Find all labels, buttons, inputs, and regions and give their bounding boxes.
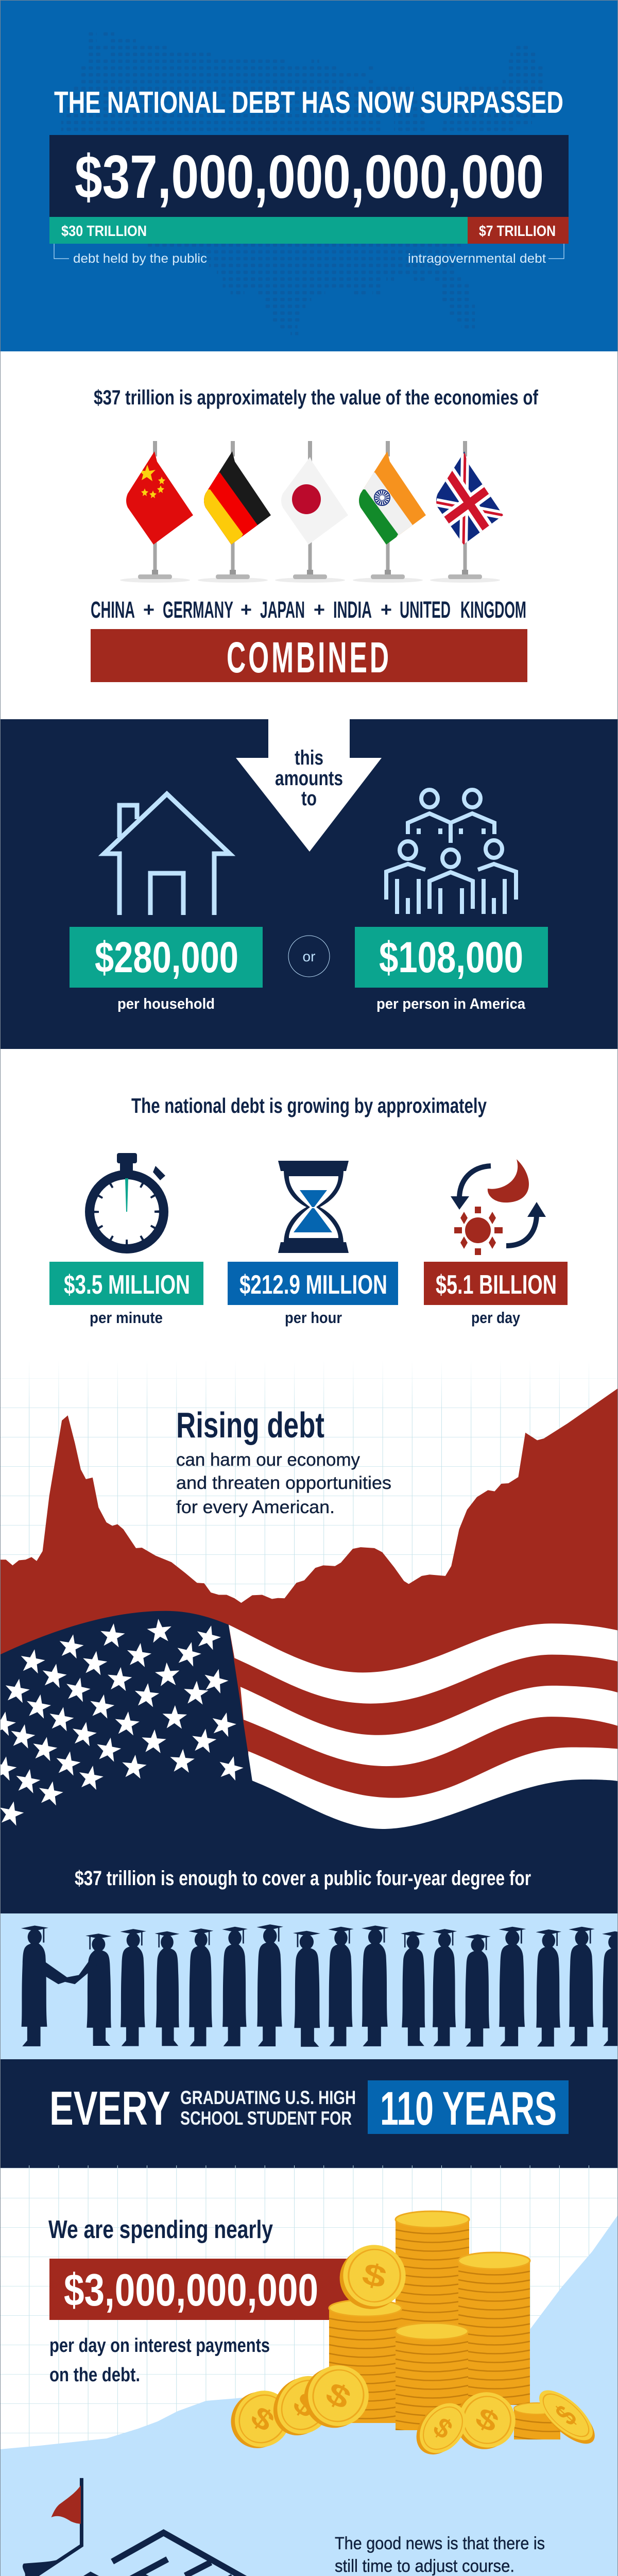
icon: group of people	[386, 790, 516, 914]
stat: per person	[355, 927, 548, 1012]
stat: per minute	[49, 1262, 203, 1327]
country list: GERMANY	[163, 597, 233, 623]
country list: JAPAN	[260, 597, 305, 623]
intragovernmental debt bar	[468, 217, 569, 244]
country list: KINGDOM	[460, 597, 526, 623]
icon: stopwatch	[90, 1153, 165, 1249]
flag: Germany	[198, 441, 271, 583]
stat: per day: per day	[471, 1309, 521, 1327]
chart: debt area	[0, 1388, 618, 1822]
label: debt held by the public	[54, 244, 207, 266]
debt held by the public bar: $30 TRILLION	[61, 223, 147, 240]
stat: per hour: per hour	[285, 1309, 342, 1327]
text: good news: still time to adjust course.	[335, 2556, 514, 2576]
label: debt held by the public: debt held by the public	[73, 251, 207, 266]
panel: light blue lower background	[0, 2215, 618, 2576]
combined banner	[91, 629, 527, 682]
flag canton and lower field	[0, 1611, 618, 1913]
panel: rising debt chart and flag	[0, 1388, 618, 1913]
stat: per day: $5.1 BILLION	[436, 1270, 557, 1300]
banner: three billion dollars: $3,000,000,000	[64, 2264, 318, 2315]
or divider: or	[303, 948, 315, 964]
stat: per household	[70, 927, 263, 1012]
stat: per household: per household	[117, 996, 215, 1012]
label: intragovernmental debt	[408, 244, 564, 266]
flag: United Kingdom	[430, 441, 503, 583]
arrow: this amounts to: amounts	[275, 767, 343, 790]
text: good news	[335, 2534, 545, 2576]
graduating text: SCHOOL STUDENT FOR	[180, 2108, 352, 2129]
maze walls	[43, 2533, 288, 2576]
flag: India	[353, 441, 426, 583]
flag: China	[120, 441, 193, 583]
country list	[91, 597, 526, 623]
debt held by the public bar	[49, 217, 468, 244]
illustration: maze with flag and figure	[0, 2478, 288, 2576]
text: we are spending nearly: We are spending nearly	[48, 2216, 273, 2244]
heading: The national debt is growing by approximately	[131, 1094, 487, 1117]
arrow: this amounts to: to	[301, 787, 317, 810]
country list: +	[314, 599, 325, 621]
stat: per hour	[228, 1262, 398, 1327]
text: good news: The good news is that there is	[335, 2534, 545, 2553]
text block: rising debt	[176, 1405, 391, 1517]
country list: +	[381, 599, 392, 621]
label: intragovernmental debt: intragovernmental debt	[408, 251, 546, 266]
flag stars	[0, 1618, 246, 1827]
stat: per person: $108,000	[379, 933, 523, 981]
arrow: this amounts to	[236, 719, 382, 852]
graduating text	[180, 2087, 356, 2129]
arrow: this amounts to: this	[295, 747, 323, 769]
text: per day on interest payments	[49, 2335, 270, 2386]
country list: +	[143, 599, 154, 621]
stat: per person: per person in America	[376, 996, 526, 1012]
flag stripes	[229, 1623, 618, 1869]
graduates silhouettes	[21, 1924, 618, 2047]
intragovernmental debt bar: $7 TRILLION	[479, 223, 556, 240]
text: per day on interest payments: per day on interest payments	[49, 2335, 270, 2357]
panel: per household and per person	[0, 719, 618, 1049]
country list: UNITED	[400, 597, 451, 623]
or divider	[288, 936, 330, 977]
panel: debt growth rate	[0, 1049, 618, 1358]
text block: rising debt: for every American.	[176, 1497, 335, 1517]
country list: +	[241, 599, 252, 621]
combined banner: COMBINED	[227, 633, 391, 682]
flag on pole	[23, 2478, 81, 2576]
country list: INDIA	[333, 597, 372, 623]
text block: rising debt: Rising debt	[176, 1405, 324, 1445]
every label: EVERY	[49, 2081, 170, 2135]
stat: per household: $280,000	[95, 933, 238, 981]
icon: day and night cycle	[451, 1159, 546, 1255]
stat: per day	[424, 1262, 568, 1327]
panel: every graduating student	[0, 2059, 618, 2168]
flag: Japan	[275, 441, 348, 583]
stat: per hour: $212.9 MILLION	[239, 1270, 387, 1300]
dotted map of the United States	[61, 34, 544, 333]
graduating text: GRADUATING U.S. HIGH	[180, 2087, 356, 2108]
illustration: stacks of gold coins	[219, 2211, 604, 2465]
text block: rising debt: can harm our economy	[176, 1450, 360, 1470]
icon: hourglass	[278, 1161, 349, 1253]
panel: economies comparison	[91, 389, 538, 682]
panel: graduates line	[0, 1913, 618, 2059]
text: per day on interest payments: on the debt.	[49, 2364, 140, 2386]
stat: per minute: per minute	[90, 1309, 163, 1327]
panel: national debt hero	[0, 0, 618, 351]
icon: house	[104, 794, 230, 915]
stat: per minute: $3.5 MILLION	[64, 1270, 190, 1300]
text block: rising debt: and threaten opportunities	[176, 1473, 391, 1493]
country list: CHINA	[91, 597, 135, 623]
